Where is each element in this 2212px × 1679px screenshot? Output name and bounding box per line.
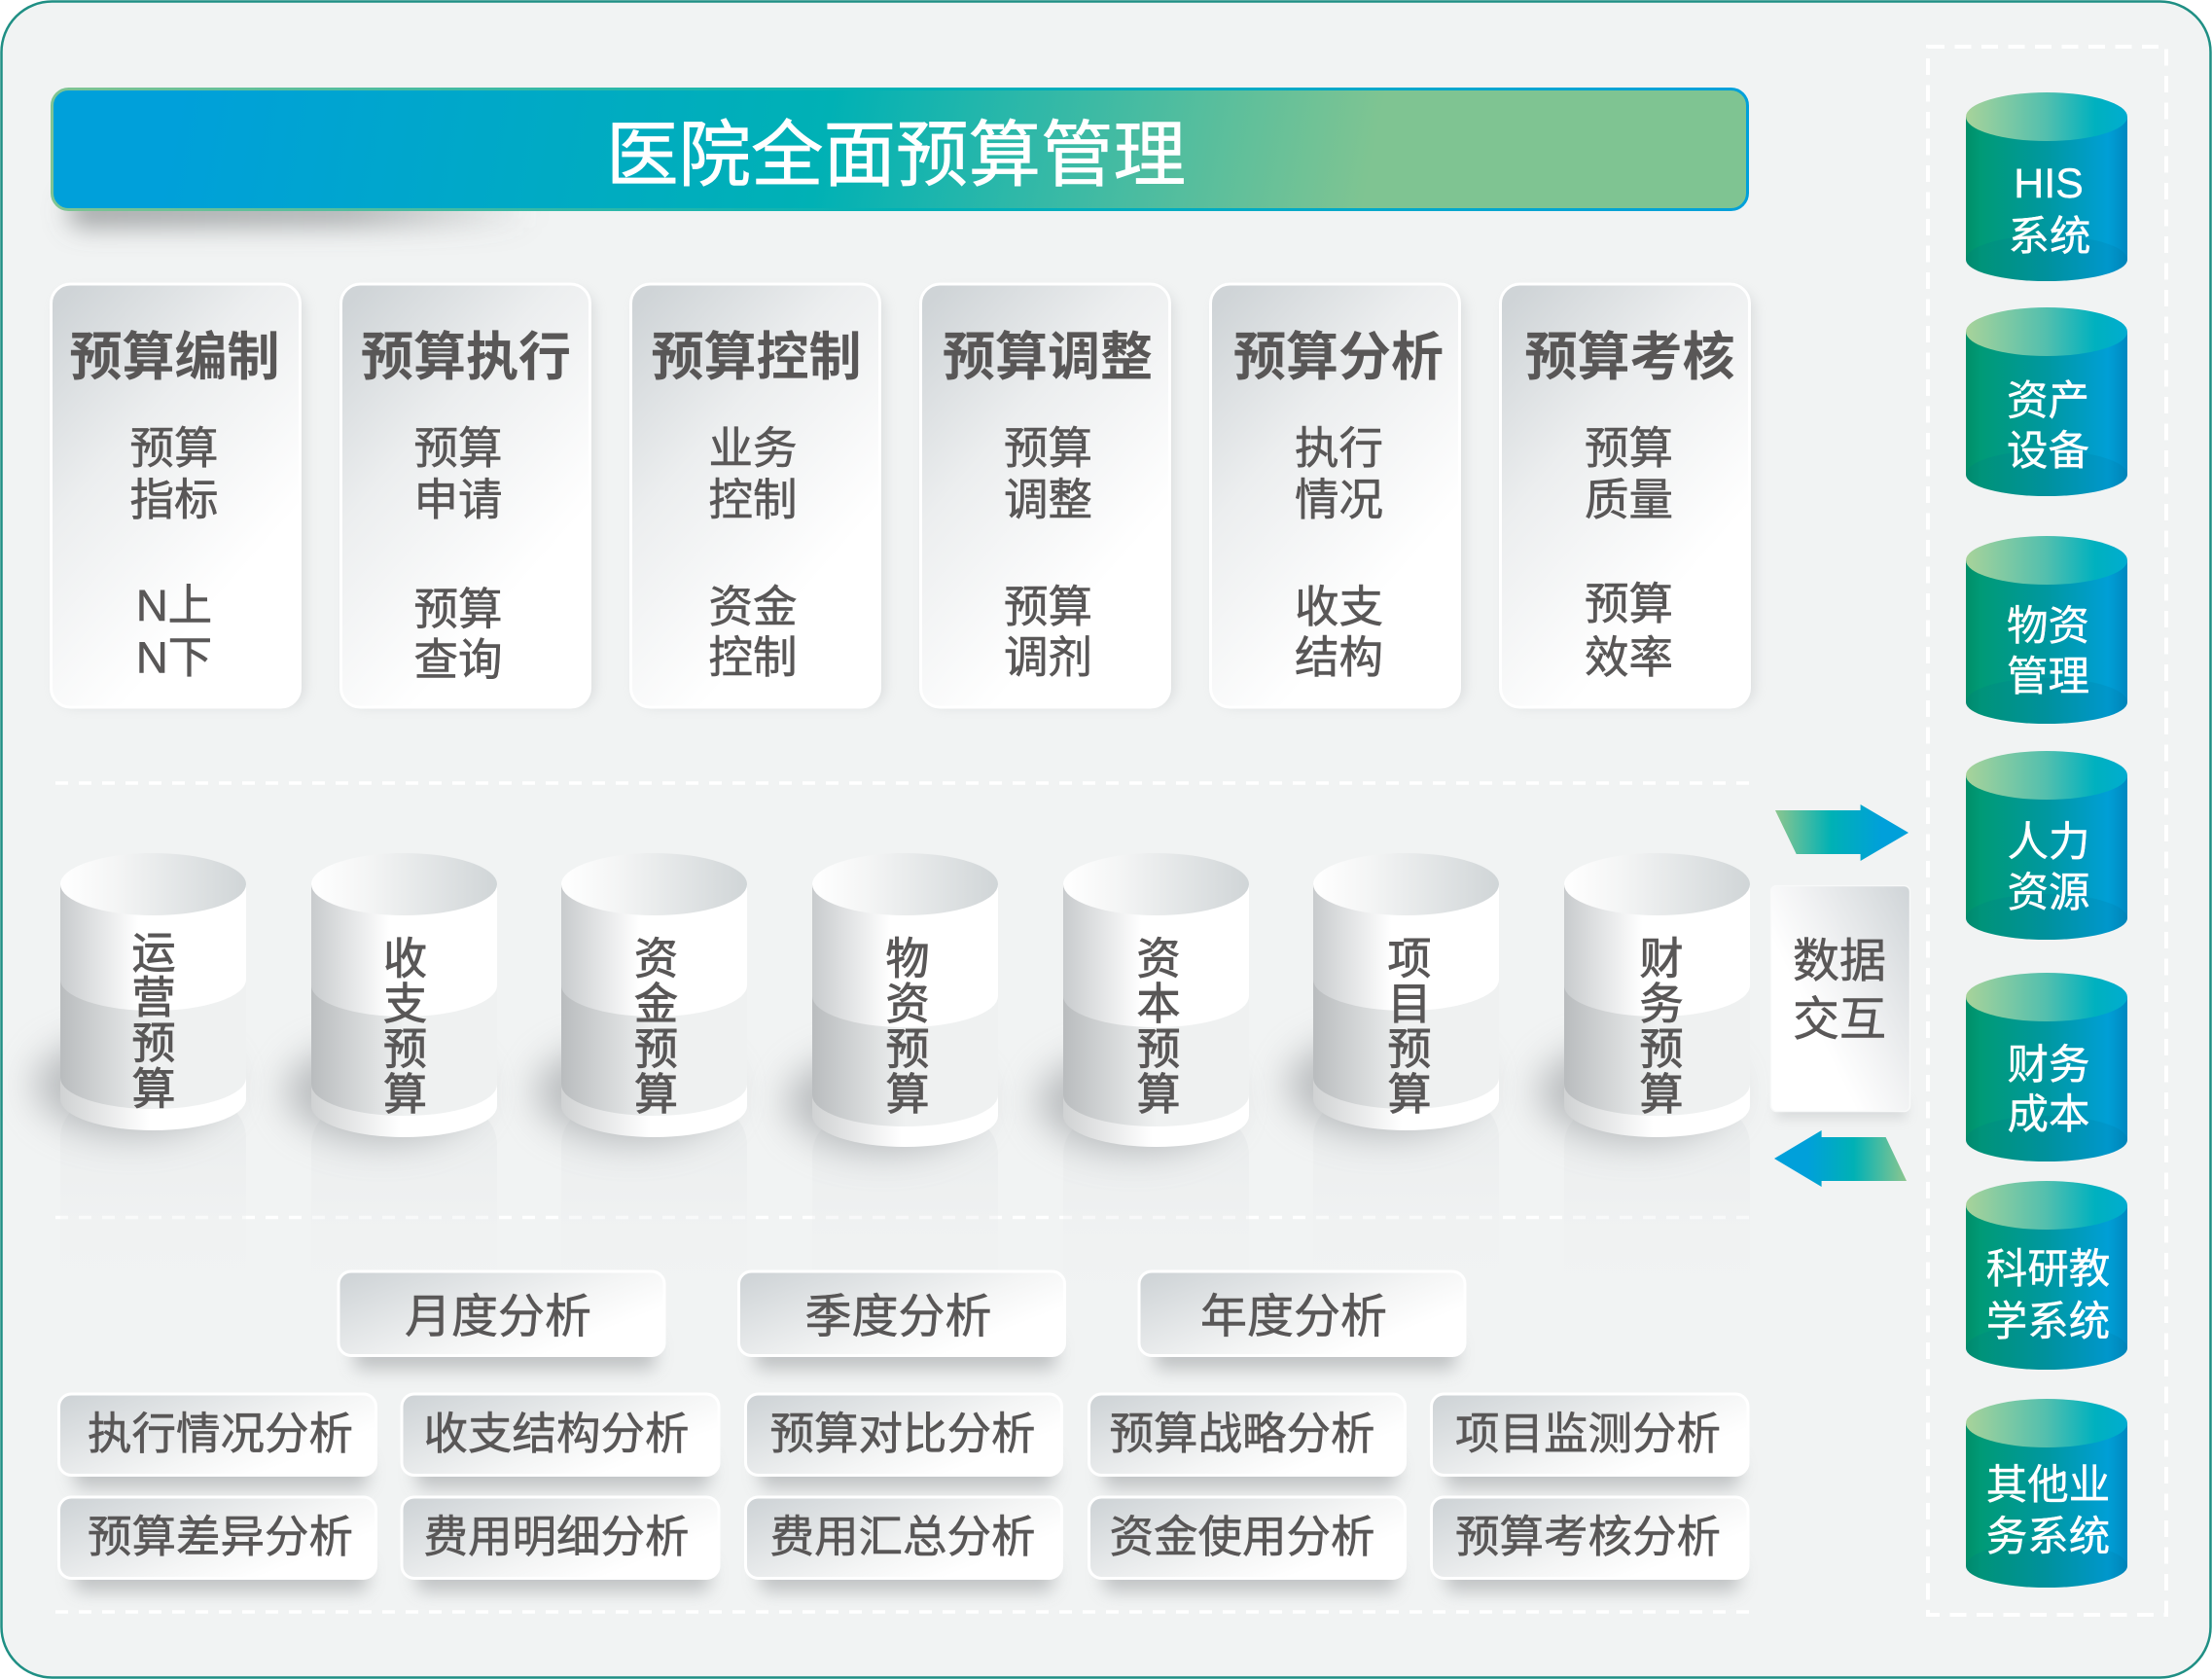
cylinder label: 预 xyxy=(1639,1024,1684,1074)
panel: analysis period buttons xyxy=(339,1271,1465,1370)
card items: 调剂 xyxy=(1004,632,1092,683)
button: 资金使用分析: 资金使用分析 xyxy=(1109,1512,1375,1562)
label: 资产 xyxy=(2007,379,2089,424)
card items: 预算 xyxy=(1004,582,1092,632)
cylinder: 物资预算 xyxy=(786,853,998,1320)
cylinder label: 本 xyxy=(1136,979,1181,1029)
cylinder: 运营预算 xyxy=(34,853,246,1304)
card: 预算编制 xyxy=(51,284,305,707)
button: 月度分析: 月度分析 xyxy=(405,1292,591,1342)
card items: 申请 xyxy=(413,475,503,525)
panel: analysis item buttons xyxy=(58,1394,1748,1591)
panel: budget modules xyxy=(51,284,1755,707)
title: 医院全面预算管理 xyxy=(606,115,1186,196)
cylinder: 项目预算 xyxy=(1287,853,1499,1304)
card items: 控制 xyxy=(708,632,798,683)
label: 管理 xyxy=(2007,655,2089,700)
cylinder label: 预 xyxy=(1387,1024,1432,1074)
label: 系统 xyxy=(2008,214,2091,261)
cylinder label: 物 xyxy=(885,934,930,983)
panel: budget cylinders xyxy=(34,853,1750,1320)
card items: N下 xyxy=(136,632,212,683)
cylinder label: 运 xyxy=(131,928,176,978)
button: 月度分析 xyxy=(339,1271,664,1370)
card items: 预算 xyxy=(413,424,503,473)
panel: external systems xyxy=(1928,47,2166,1615)
cylinder label: 目 xyxy=(1387,979,1432,1029)
system: 资产设备 xyxy=(1966,307,2127,496)
cylinder label: 算 xyxy=(885,1070,930,1119)
card items: 控制 xyxy=(708,475,798,525)
cylinder label: 金 xyxy=(634,979,678,1029)
label: 成本 xyxy=(2007,1092,2090,1138)
label: 交互 xyxy=(1793,994,1886,1046)
label: HIS xyxy=(2014,161,2084,207)
card heading: 预算调整 xyxy=(943,329,1153,387)
button: 收支结构分析: 收支结构分析 xyxy=(423,1409,690,1459)
card items: 调整 xyxy=(1004,475,1092,525)
cylinder label: 算 xyxy=(383,1070,427,1119)
card items: 预算 xyxy=(129,424,219,473)
card items: 预算 xyxy=(1004,424,1092,473)
label: 物资 xyxy=(2007,604,2089,650)
button: 预算对比分析 xyxy=(745,1394,1062,1488)
card: 预算调整 xyxy=(920,284,1175,707)
card items: 结构 xyxy=(1295,632,1383,683)
cylinder: 财务预算 xyxy=(1538,853,1750,1310)
button: 预算差异分析 xyxy=(58,1497,375,1591)
label: 其他业 xyxy=(1986,1463,2110,1509)
system: 科研教学系统 xyxy=(1966,1181,2127,1370)
cylinder label: 预 xyxy=(383,1024,427,1074)
button: 季度分析 xyxy=(739,1271,1064,1370)
cylinder label: 资 xyxy=(885,979,930,1029)
card: 预算考核 xyxy=(1500,284,1755,707)
button: 预算差异分析: 预算差异分析 xyxy=(88,1512,353,1562)
system: 物资管理 xyxy=(1966,536,2127,724)
cylinder label: 算 xyxy=(1639,1070,1684,1119)
label: 人力 xyxy=(2007,820,2090,866)
card items: 资金 xyxy=(708,582,798,632)
arrow: data out to systems xyxy=(1775,804,1909,861)
label: 数据 xyxy=(1793,936,1886,987)
card: 预算分析 xyxy=(1210,284,1465,707)
label: 学系统 xyxy=(1986,1300,2110,1345)
cylinder label: 算 xyxy=(1387,1070,1432,1119)
system: 人力资源 xyxy=(1966,751,2127,940)
card items: 预算 xyxy=(413,585,503,634)
card items: 指标 xyxy=(129,475,219,525)
cylinder label: 算 xyxy=(131,1064,176,1114)
cylinder label: 算 xyxy=(1136,1070,1181,1119)
label: 科研教 xyxy=(1986,1247,2110,1293)
card heading: 预算执行 xyxy=(361,329,571,387)
button: 季度分析: 季度分析 xyxy=(804,1292,992,1342)
cylinder label: 营 xyxy=(131,973,176,1022)
button: 执行情况分析: 执行情况分析 xyxy=(88,1409,353,1459)
button: 预算考核分析: 预算考核分析 xyxy=(1455,1512,1721,1562)
card heading: 预算考核 xyxy=(1525,329,1735,387)
cylinder label: 收 xyxy=(383,934,427,983)
cylinder label: 预 xyxy=(131,1018,176,1068)
cylinder label: 资 xyxy=(1136,934,1181,983)
button: 费用汇总分析: 费用汇总分析 xyxy=(769,1512,1036,1562)
title banner xyxy=(53,89,1747,228)
card items: 预算 xyxy=(1585,580,1673,628)
button: 预算战略分析 xyxy=(1089,1394,1405,1488)
button: 项目监测分析: 项目监测分析 xyxy=(1455,1409,1721,1459)
cylinder label: 务 xyxy=(1639,979,1684,1029)
button: 资金使用分析 xyxy=(1089,1497,1405,1591)
system: HIS系统 xyxy=(1966,92,2127,281)
card items: 执行 xyxy=(1295,424,1383,473)
cylinder label: 项 xyxy=(1387,934,1432,983)
cylinder label: 预 xyxy=(634,1024,678,1074)
card items: 情况 xyxy=(1295,475,1383,525)
button: 预算对比分析: 预算对比分析 xyxy=(769,1409,1036,1459)
label: 务系统 xyxy=(1986,1515,2110,1560)
card items: 业务 xyxy=(708,424,798,473)
cylinder: 资金预算 xyxy=(535,853,747,1310)
card heading: 预算控制 xyxy=(652,329,862,387)
card heading: 预算分析 xyxy=(1233,329,1444,387)
button: 费用明细分析: 费用明细分析 xyxy=(423,1512,690,1562)
button: 预算考核分析 xyxy=(1432,1497,1748,1591)
card heading: 预算编制 xyxy=(70,329,280,387)
cylinder: 收支预算 xyxy=(285,853,497,1310)
card: 预算控制 xyxy=(630,284,885,707)
cylinder label: 资 xyxy=(634,934,678,983)
card: 预算执行 xyxy=(340,284,595,707)
card items: 质量 xyxy=(1585,475,1673,525)
card items: 效率 xyxy=(1585,632,1673,683)
button: 执行情况分析 xyxy=(58,1394,375,1488)
button: 费用汇总分析 xyxy=(745,1497,1062,1591)
button: 费用明细分析 xyxy=(402,1497,719,1591)
button: 年度分析: 年度分析 xyxy=(1200,1292,1387,1342)
system: 财务成本 xyxy=(1966,973,2127,1161)
button: 年度分析 xyxy=(1139,1271,1465,1370)
cylinder: 资本预算 xyxy=(1037,853,1249,1320)
arrow: data in from systems xyxy=(1774,1130,1907,1187)
button: 预算战略分析: 预算战略分析 xyxy=(1109,1409,1375,1459)
card items: 查询 xyxy=(413,635,503,685)
cylinder label: 支 xyxy=(383,979,427,1029)
button: 收支结构分析 xyxy=(402,1394,719,1488)
label: 设备 xyxy=(2007,429,2089,475)
label: 资源 xyxy=(2007,871,2090,916)
card items: N上 xyxy=(136,581,212,630)
button: 项目监测分析 xyxy=(1432,1394,1748,1488)
cylinder label: 预 xyxy=(1136,1024,1181,1074)
card items: 收支 xyxy=(1295,582,1383,632)
card items: 预算 xyxy=(1585,424,1673,473)
system: 其他业务系统 xyxy=(1966,1399,2127,1588)
panel: data interaction xyxy=(1770,885,1910,1119)
label: 财务 xyxy=(2007,1043,2090,1089)
cylinder label: 预 xyxy=(885,1024,930,1074)
cylinder label: 财 xyxy=(1639,934,1684,983)
cylinder label: 算 xyxy=(634,1070,678,1119)
